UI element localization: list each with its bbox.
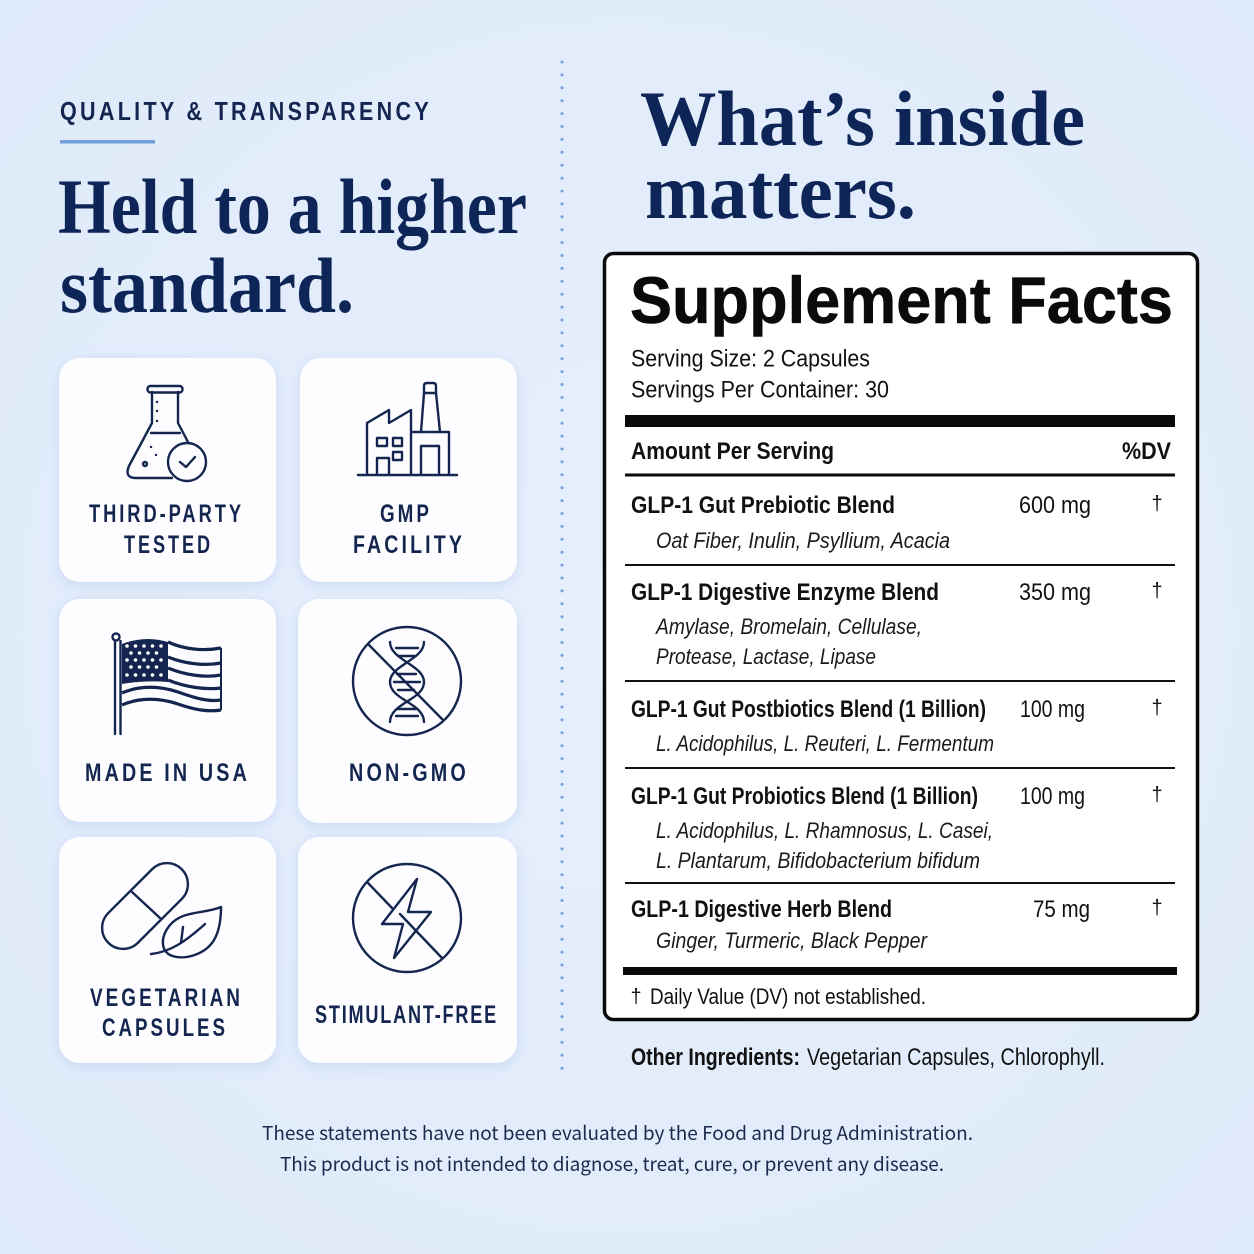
thick rule bbox=[625, 415, 1175, 427]
label: gmp facility bbox=[353, 500, 465, 559]
row: prebiotic blend: GLP-1 Gut Prebiotic Blend bbox=[631, 492, 895, 519]
row: probiotics blend: L. Acidophilus, L. Rhamnosus, L. Casei, bbox=[656, 818, 993, 843]
thick rule bbox=[623, 967, 1177, 975]
label: third-party tested: TESTED bbox=[124, 531, 213, 559]
daily value note: † bbox=[630, 986, 642, 1008]
icon: american flag bbox=[112, 634, 221, 734]
panel: made in usa bbox=[59, 599, 276, 822]
row: enzyme blend: GLP-1 Digestive Enzyme Blend bbox=[631, 579, 939, 606]
label: third-party tested: THIRD-PARTY bbox=[89, 500, 244, 528]
row: probiotics blend: † bbox=[1151, 784, 1163, 806]
row: probiotics blend: 100 mg bbox=[1020, 783, 1085, 810]
row: postbiotics blend: 100 mg bbox=[1020, 696, 1085, 723]
row: enzyme blend: † bbox=[1151, 580, 1163, 602]
supplement facts title: Supplement Facts bbox=[630, 263, 1173, 337]
dotted divider bbox=[560, 62, 564, 1078]
label: gmp facility: FACILITY bbox=[353, 531, 465, 559]
icon: factory bbox=[358, 383, 457, 475]
table header: %DV bbox=[1122, 438, 1172, 465]
label: vegetarian capsules: CAPSULES bbox=[102, 1014, 228, 1042]
row: prebiotic blend: † bbox=[1151, 493, 1163, 515]
label: gmp facility: GMP bbox=[380, 500, 432, 528]
fda disclaimer bbox=[262, 1119, 973, 1177]
row: herb blend bbox=[631, 896, 1163, 953]
heading: held to a higher standard: standard. bbox=[60, 242, 354, 329]
panel: non-gmo bbox=[298, 599, 517, 823]
rule bbox=[625, 882, 1175, 884]
table header: Amount Per Serving bbox=[631, 438, 834, 465]
table header bbox=[631, 438, 1172, 465]
label: stimulant-free: STIMULANT-FREE bbox=[315, 1001, 498, 1029]
heading: what's inside matters: What’s inside bbox=[640, 75, 1085, 162]
row: enzyme blend bbox=[631, 579, 1163, 669]
row: enzyme blend: 350 mg bbox=[1019, 579, 1091, 606]
row: prebiotic blend: Oat Fiber, Inulin, Psyllium, Acacia bbox=[656, 528, 950, 553]
icon: lightning bolt crossed out bbox=[353, 864, 461, 972]
other ingredients: Vegetarian Capsules, Chlorophyll. bbox=[807, 1044, 1105, 1071]
label: vegetarian capsules bbox=[90, 984, 243, 1042]
rule bbox=[625, 680, 1175, 682]
row: postbiotics blend: L. Acidophilus, L. Reuteri, L. Fermentum bbox=[656, 731, 994, 756]
panel: vegetarian capsules bbox=[59, 837, 276, 1063]
other ingredients bbox=[631, 1044, 1105, 1071]
panel: third-party tested bbox=[59, 358, 276, 582]
rule bbox=[625, 767, 1175, 769]
row: probiotics blend: L. Plantarum, Bifidobacterium bifidum bbox=[656, 848, 980, 873]
label: non-gmo: NON-GMO bbox=[349, 759, 469, 787]
fda disclaimer: This product is not intended to diagnose, treat, cure, or prevent any disease. bbox=[280, 1150, 944, 1177]
icon: flask with check bbox=[128, 386, 206, 481]
row: postbiotics blend bbox=[631, 696, 1163, 756]
row: probiotics blend bbox=[631, 783, 1163, 873]
fda disclaimer: These statements have not been evaluated by the Food and Drug Administration. bbox=[262, 1119, 973, 1146]
heading: held to a higher standard bbox=[58, 163, 527, 329]
row: postbiotics blend: † bbox=[1151, 697, 1163, 719]
row: prebiotic blend bbox=[631, 492, 1163, 553]
label: made in usa: MADE IN USA bbox=[85, 759, 250, 787]
panel: gmp facility bbox=[300, 358, 517, 582]
eyebrow underline bbox=[60, 140, 155, 144]
other ingredients: Other Ingredients: bbox=[631, 1044, 800, 1071]
serving information bbox=[631, 346, 889, 404]
serving information: Serving Size: 2 Capsules bbox=[631, 346, 870, 372]
row: herb blend: † bbox=[1151, 897, 1163, 919]
panel: supplement facts label bbox=[604, 254, 1198, 1020]
label: third-party tested bbox=[89, 500, 244, 559]
row: prebiotic blend: 600 mg bbox=[1019, 492, 1091, 519]
serving information: Servings Per Container: 30 bbox=[631, 376, 889, 404]
icon: capsule and leaf bbox=[93, 854, 221, 958]
heading: what's inside matters bbox=[640, 75, 1085, 235]
label: vegetarian capsules: VEGETARIAN bbox=[90, 984, 243, 1012]
panel: stimulant-free bbox=[298, 837, 517, 1063]
rule bbox=[625, 474, 1175, 476]
heading: what's inside matters: matters. bbox=[645, 148, 916, 235]
daily value note: Daily Value (DV) not established. bbox=[650, 984, 926, 1009]
row: enzyme blend: Amylase, Bromelain, Cellulase, bbox=[654, 614, 922, 639]
row: probiotics blend: GLP-1 Gut Probiotics Blend (1 Billion) bbox=[631, 783, 978, 810]
row: herb blend: GLP-1 Digestive Herb Blend bbox=[631, 896, 892, 923]
row: postbiotics blend: GLP-1 Gut Postbiotics Blend (1 Billion) bbox=[631, 696, 986, 723]
row: herb blend: Ginger, Turmeric, Black Pepper bbox=[656, 928, 928, 953]
row: enzyme blend: Protease, Lactase, Lipase bbox=[656, 644, 876, 669]
eyebrow: quality and transparency: QUALITY & TRANSPARENCY bbox=[60, 96, 432, 126]
heading: held to a higher standard: Held to a higher bbox=[58, 163, 527, 250]
icon: dna crossed out bbox=[353, 627, 461, 735]
row: herb blend: 75 mg bbox=[1033, 896, 1090, 923]
rule bbox=[625, 564, 1175, 566]
